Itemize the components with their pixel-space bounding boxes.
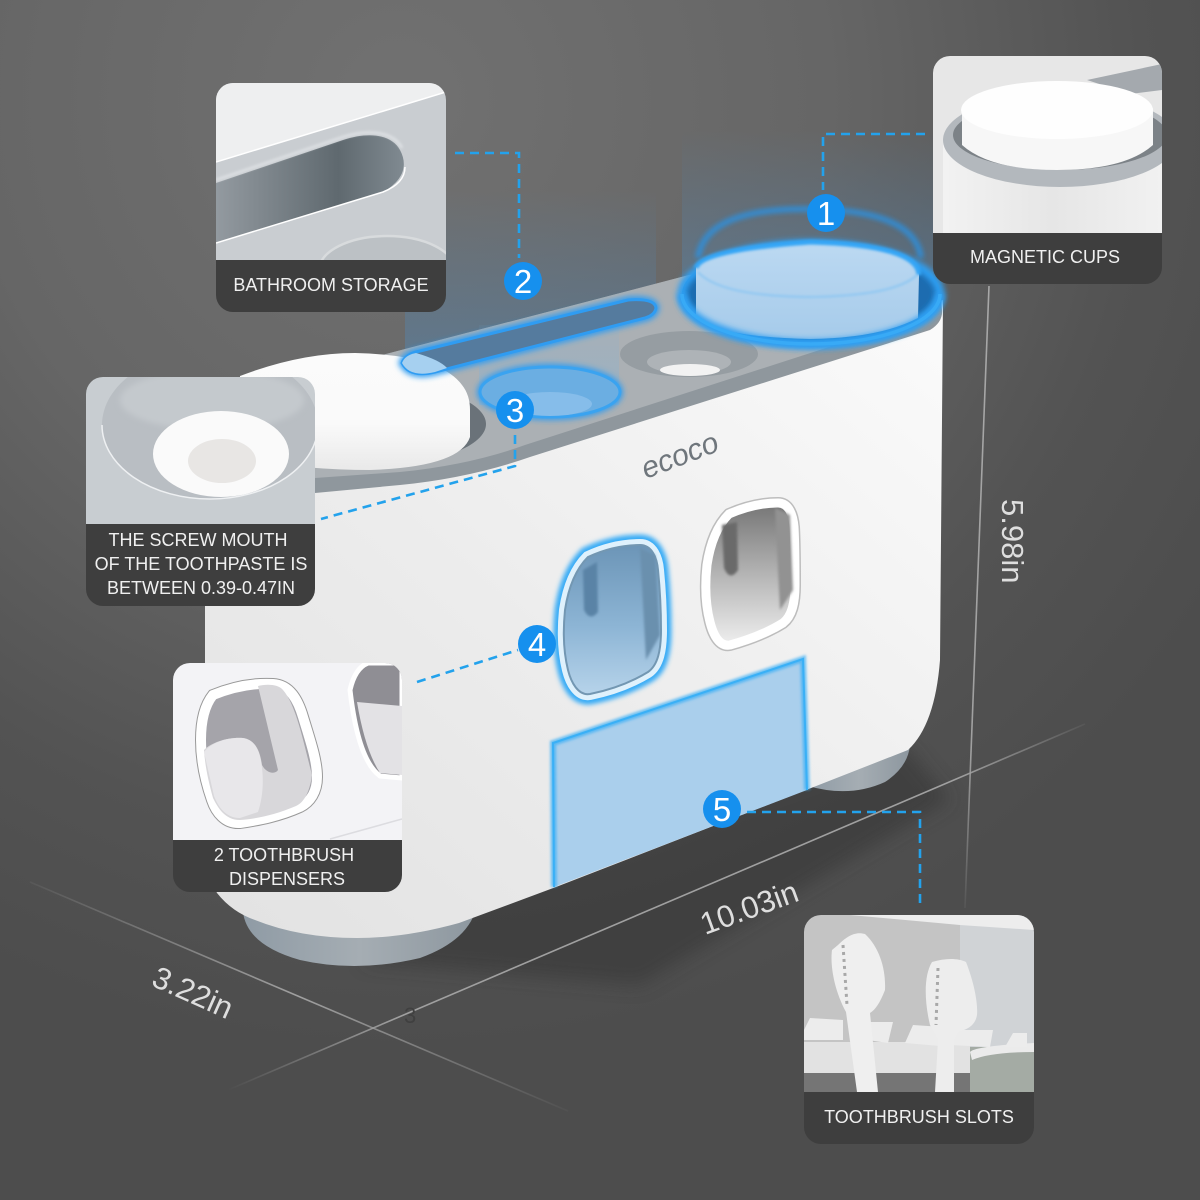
panel: screw mouth: OF THE TOOTHPASTE IS (95, 554, 307, 574)
callout 2 number (504, 262, 542, 300)
panel: screw mouth: BETWEEN 0.39-0.47IN (107, 578, 295, 598)
right dispenser window (706, 503, 795, 645)
callout 4 number: 4 (528, 626, 546, 663)
screw mouth highlighted (480, 367, 620, 417)
callout 4 number (518, 625, 556, 663)
callout 3 number: 3 (506, 392, 524, 429)
callout 2 number: 2 (514, 263, 532, 300)
panel: bathroom storage: BATHROOM STORAGE (233, 275, 429, 295)
panel: magnetic cups (933, 56, 1177, 284)
panel: magnetic cups: MAGNETIC CUPS (970, 247, 1120, 267)
label (933, 233, 1162, 284)
panel: bathroom storage (216, 83, 455, 312)
label (804, 1092, 1034, 1144)
label (173, 840, 402, 892)
highlighted cup (682, 209, 940, 344)
panel: screw mouth: THE SCREW MOUTH (108, 530, 288, 550)
brush slot panel (553, 659, 807, 887)
blue light beams (405, 130, 933, 380)
dimension: height: 5.98in (995, 499, 1030, 583)
label (86, 524, 315, 606)
storage slot highlighted (402, 300, 656, 374)
top plate (240, 262, 938, 478)
panel: toothbrush dispensers: DISPENSERS (229, 869, 345, 889)
panel: screw mouth (86, 377, 315, 606)
label (216, 260, 446, 312)
panel: toothbrush dispensers: 2 TOOTHBRUSH (214, 845, 354, 865)
dimension lines (30, 286, 1085, 1111)
panel: toothbrush slots: TOOTHBRUSH SLOTS (824, 1107, 1014, 1127)
callout 5 number: 5 (713, 791, 731, 828)
panel: toothbrush slots (804, 915, 1034, 1144)
callout 3 number (496, 391, 534, 429)
body (205, 300, 943, 938)
cast shadow (360, 745, 950, 985)
left dispenser window highlighted (564, 545, 661, 694)
rim lip (240, 262, 942, 493)
stray mark: 3 (404, 1003, 416, 1028)
dimension: width: 10.03in (695, 874, 803, 942)
callout 5 number (703, 790, 741, 828)
mouth beam tint (479, 325, 619, 405)
panel: toothbrush dispensers (173, 663, 402, 892)
left cup (240, 353, 486, 470)
dimension: depth: 3.22in (147, 959, 239, 1026)
logo: ecoco (637, 426, 723, 486)
callout 1 number (807, 194, 845, 232)
product: dispenser (205, 130, 943, 966)
connector lines (321, 134, 925, 903)
second mouth (620, 331, 758, 377)
callout 1 number: 1 (817, 195, 835, 232)
suction feet (243, 745, 910, 966)
